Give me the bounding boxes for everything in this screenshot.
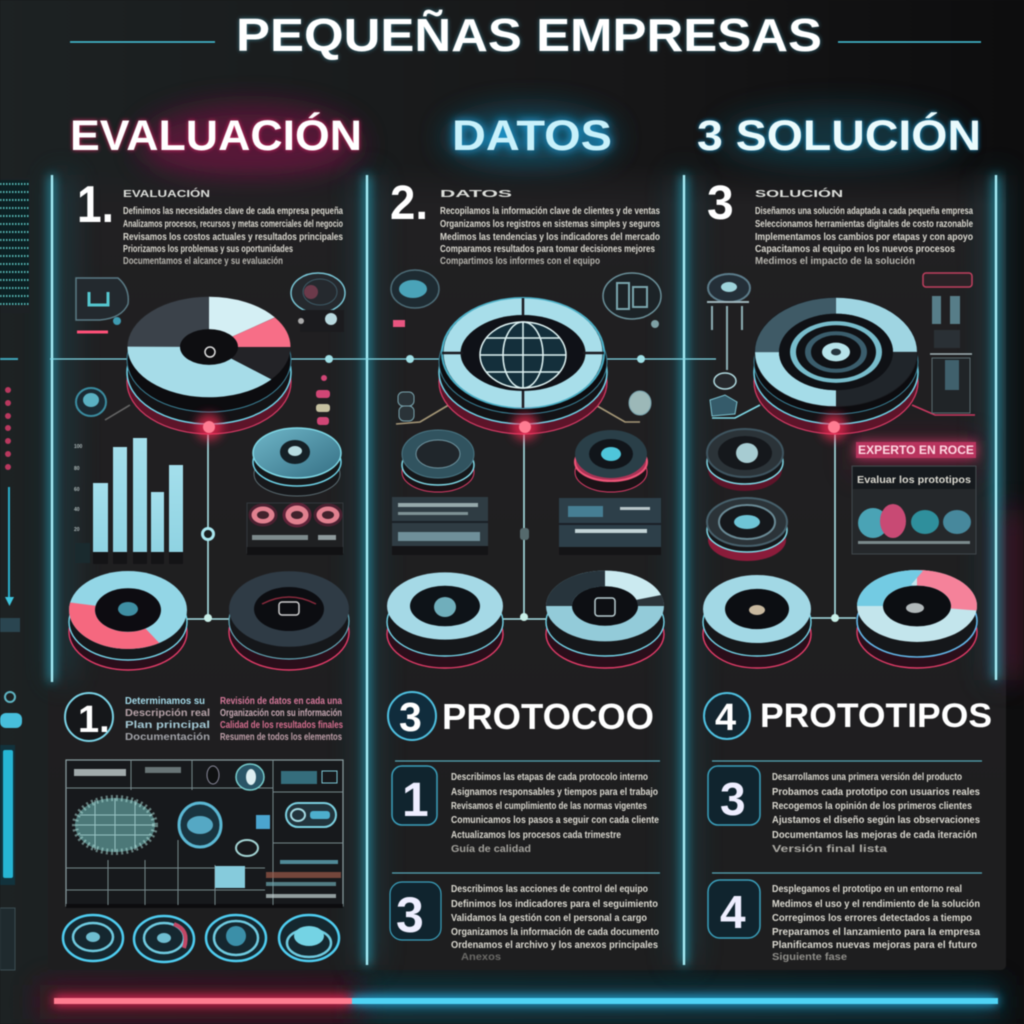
column 2 intro text: Organizamos los registros en sistemas simples y seguros [440,218,660,230]
column 2 intro text: Compartimos los informes con el equipo [440,255,600,267]
step: prototipos 3 [708,761,982,855]
section header: protocolo: 3 [399,694,422,740]
data card: datos left [392,497,488,555]
bar chart: 40 [74,507,80,513]
icons: datos left badges [391,270,439,327]
heading: evaluación: EVALUACIÓN [70,111,362,160]
icons: datos side badges [398,391,651,421]
step: protocolo 3: Organizamos la información de cada documento [451,926,659,938]
dial row [63,915,339,962]
column 2 intro text: Comparamos resultados para tomar decisiones mejores [440,243,655,255]
dashboard panel [66,760,343,908]
section header: 1: Documentación [125,731,210,743]
step: protocolo 3: Definimos los indicadores para el seguimiento [451,898,658,910]
column 3 intro text [707,177,973,267]
bar chart: 20 [74,527,80,533]
step: protocolo 3: Ordenamos el archivo y los anexos principales [451,939,658,951]
title [70,9,981,61]
section header: prototipos: 4 [715,697,736,739]
small disk: evaluación [253,428,341,496]
chart card: solución: Evaluar los prototipos [857,474,971,486]
section header: prototipos: PROTOTIPOS [760,697,992,735]
step: protocolo 1: Describimos las etapas de cada protocolo interno [451,771,648,783]
main globe disk: datos [439,298,607,440]
section header: 1: Descripción real [125,707,210,719]
ring disk 2 [229,571,349,670]
column 1 intro text: Priorizamos los problemas y sus oportunidades [123,243,293,255]
section header: 1: Plan principal [125,719,210,731]
step: prototipos 4: Planificamos nuevas mejoras para el futuro [772,939,977,951]
neon footer bar [54,996,998,1005]
column 2 intro text [390,177,660,267]
ring disk 3 [387,572,503,668]
bar chart: 60 [74,487,80,493]
step: prototipos 4: 4 [720,886,746,938]
heading: solución: 3 SOLUCIÓN [697,111,981,160]
step: protocolo 3: Validamos la gestión con el personal a cargo [451,912,647,924]
icons: datos right badges [603,273,661,328]
column 1 intro text: Documentamos el alcance y su evaluación [123,255,283,267]
column 3 intro text: 3 [707,177,734,230]
left edge: pink indicators [0,359,18,470]
chart card: solución: EXPERTO EN ROCE [858,443,974,457]
step: protocolo 1: Comunicamos los pasos a seguir con cada cliente [451,814,659,826]
step: prototipos 4: Preparamos el lanzamiento para la empresa [772,926,980,938]
column 1 intro text: Revisamos los costos actuales y resultados principales [123,231,343,243]
bar chart [74,438,183,564]
ring disk 4 [546,571,664,668]
section header: 1: Calidad de los resultados finales [220,719,343,731]
step: prototipos 4: Siguiente fase [772,951,847,963]
heading: datos: DATOS [452,112,612,160]
bar chart: 80 [74,466,80,472]
left edge: dotted data strip [0,178,30,313]
icon: screen badge left [76,278,128,332]
column 3 intro text: Implementamos los cambios por etapas y con apoyo [755,231,973,243]
step: protocolo 1: Actualizamos los procesos cada trimestre [451,829,621,841]
column 1 intro text [77,176,343,267]
section header: 1: Resumen de todos los elementos [220,731,342,743]
column 1 intro text: Definimos las necesidades clave de cada empresa pequeña [123,205,343,217]
step: protocolo 3: Describimos las acciones de control del equipo [451,883,648,895]
title: PEQUEÑAS EMPRESAS [236,9,822,61]
section header: 1 [65,693,343,743]
data card: datos right [559,498,661,555]
step: prototipos 4: Corregimos los errores detectados a tiempo [772,912,972,924]
column 2 intro text: Medimos las tendencias y los indicadores del mercado [440,231,660,243]
left edge: toggle and bar [0,692,22,970]
three-dial panel [247,503,343,555]
main concentric disk: solución [754,297,918,440]
bar chart: 100 [74,444,83,450]
connector lines [105,403,975,619]
step: prototipos 3: Desarrollamos una primera versión del producto [772,771,962,783]
step: protocolo 1: 1 [402,774,429,827]
chart card: solución [852,441,977,554]
column 1 intro text: Analizamos procesos, recursos y metas comerciales del negocio [123,218,343,230]
ring disk 1 [65,568,191,670]
small disk: solución lower [707,498,787,561]
section header: 1: 1. [78,699,110,741]
neon column dividers [50,175,996,965]
section header: protocolo [388,692,654,740]
section header: prototipos [704,693,992,739]
column 1 intro text: 1. [77,176,114,234]
step: protocolo 1 [392,761,660,855]
icon: lens badge [291,273,345,332]
heading: datos: DATOS [452,112,612,160]
section header: 1: Determinamos su [125,695,205,707]
step: prototipos 3: Recogemos la opinión de los primeros clientes [772,800,972,812]
step: prototipos 3: 3 [720,773,746,825]
ring disk 6 [857,570,977,668]
step: prototipos 3: Ajustamos el diseño según las observaciones [772,814,980,826]
column 1 intro text: EVALUACIÓN [123,187,210,200]
column 3 intro text: SOLUCIÓN [755,187,843,200]
heading: evaluación: EVALUACIÓN [70,111,362,160]
column 2 intro text: 2. [390,177,428,230]
step: prototipos 3: Probamos cada prototipo con usuarios reales [772,786,980,798]
section header: protocolo: PROTOCOO [442,696,654,737]
step: protocolo 3: 3 [396,887,424,943]
column 2 intro text: Recopilamos la información clave de clientes y de ventas [440,205,660,217]
main pie disk: evaluación [127,297,291,440]
title: PEQUEÑAS EMPRESAS [236,9,822,61]
heading: solución: 3 SOLUCIÓN [697,111,981,160]
connector nodes [202,528,839,622]
small disk: datos right [575,430,647,492]
icon: small teal dial [76,388,106,416]
step: prototipos 4: Desplegamos el prototipo en un entorno real [772,883,962,895]
column 2 intro text: DATOS [440,188,512,200]
section header: 1: Revisión de datos en cada una [220,695,342,707]
icons: solución right tower [923,273,972,413]
icon: pink status dots [316,375,330,425]
step: protocolo 3 [390,873,660,963]
section header: 1: Organización con su información [220,707,342,719]
ring disk 5 [703,575,811,668]
icon: globe [480,322,566,388]
icons: solución left tower [707,274,750,416]
step: prototipos 3: Versión final lista [772,843,887,855]
step: prototipos 3: Documentamos las mejoras de cada iteración [772,829,977,841]
step: protocolo 1: Asignamos responsables y tiempos para el trabajo [451,786,658,798]
small disk: solución upper [707,429,783,491]
column 3 intro text: Capacitamos al equipo en los nuevos procesos [755,243,955,255]
step: protocolo 1: Revisamos el cumplimiento de las normas vigentes [451,800,647,812]
step: prototipos 4: Medimos el uso y el rendimiento de la solución [772,898,980,910]
step: protocolo 3: Anexos [461,951,501,963]
step: prototipos 4 [708,873,982,963]
column 3 intro text: Medimos el impacto de la solución [755,255,915,267]
step: protocolo 1: Guía de calidad [451,843,531,855]
small disk: datos left [402,430,474,492]
left edge: gauge line [0,487,20,632]
